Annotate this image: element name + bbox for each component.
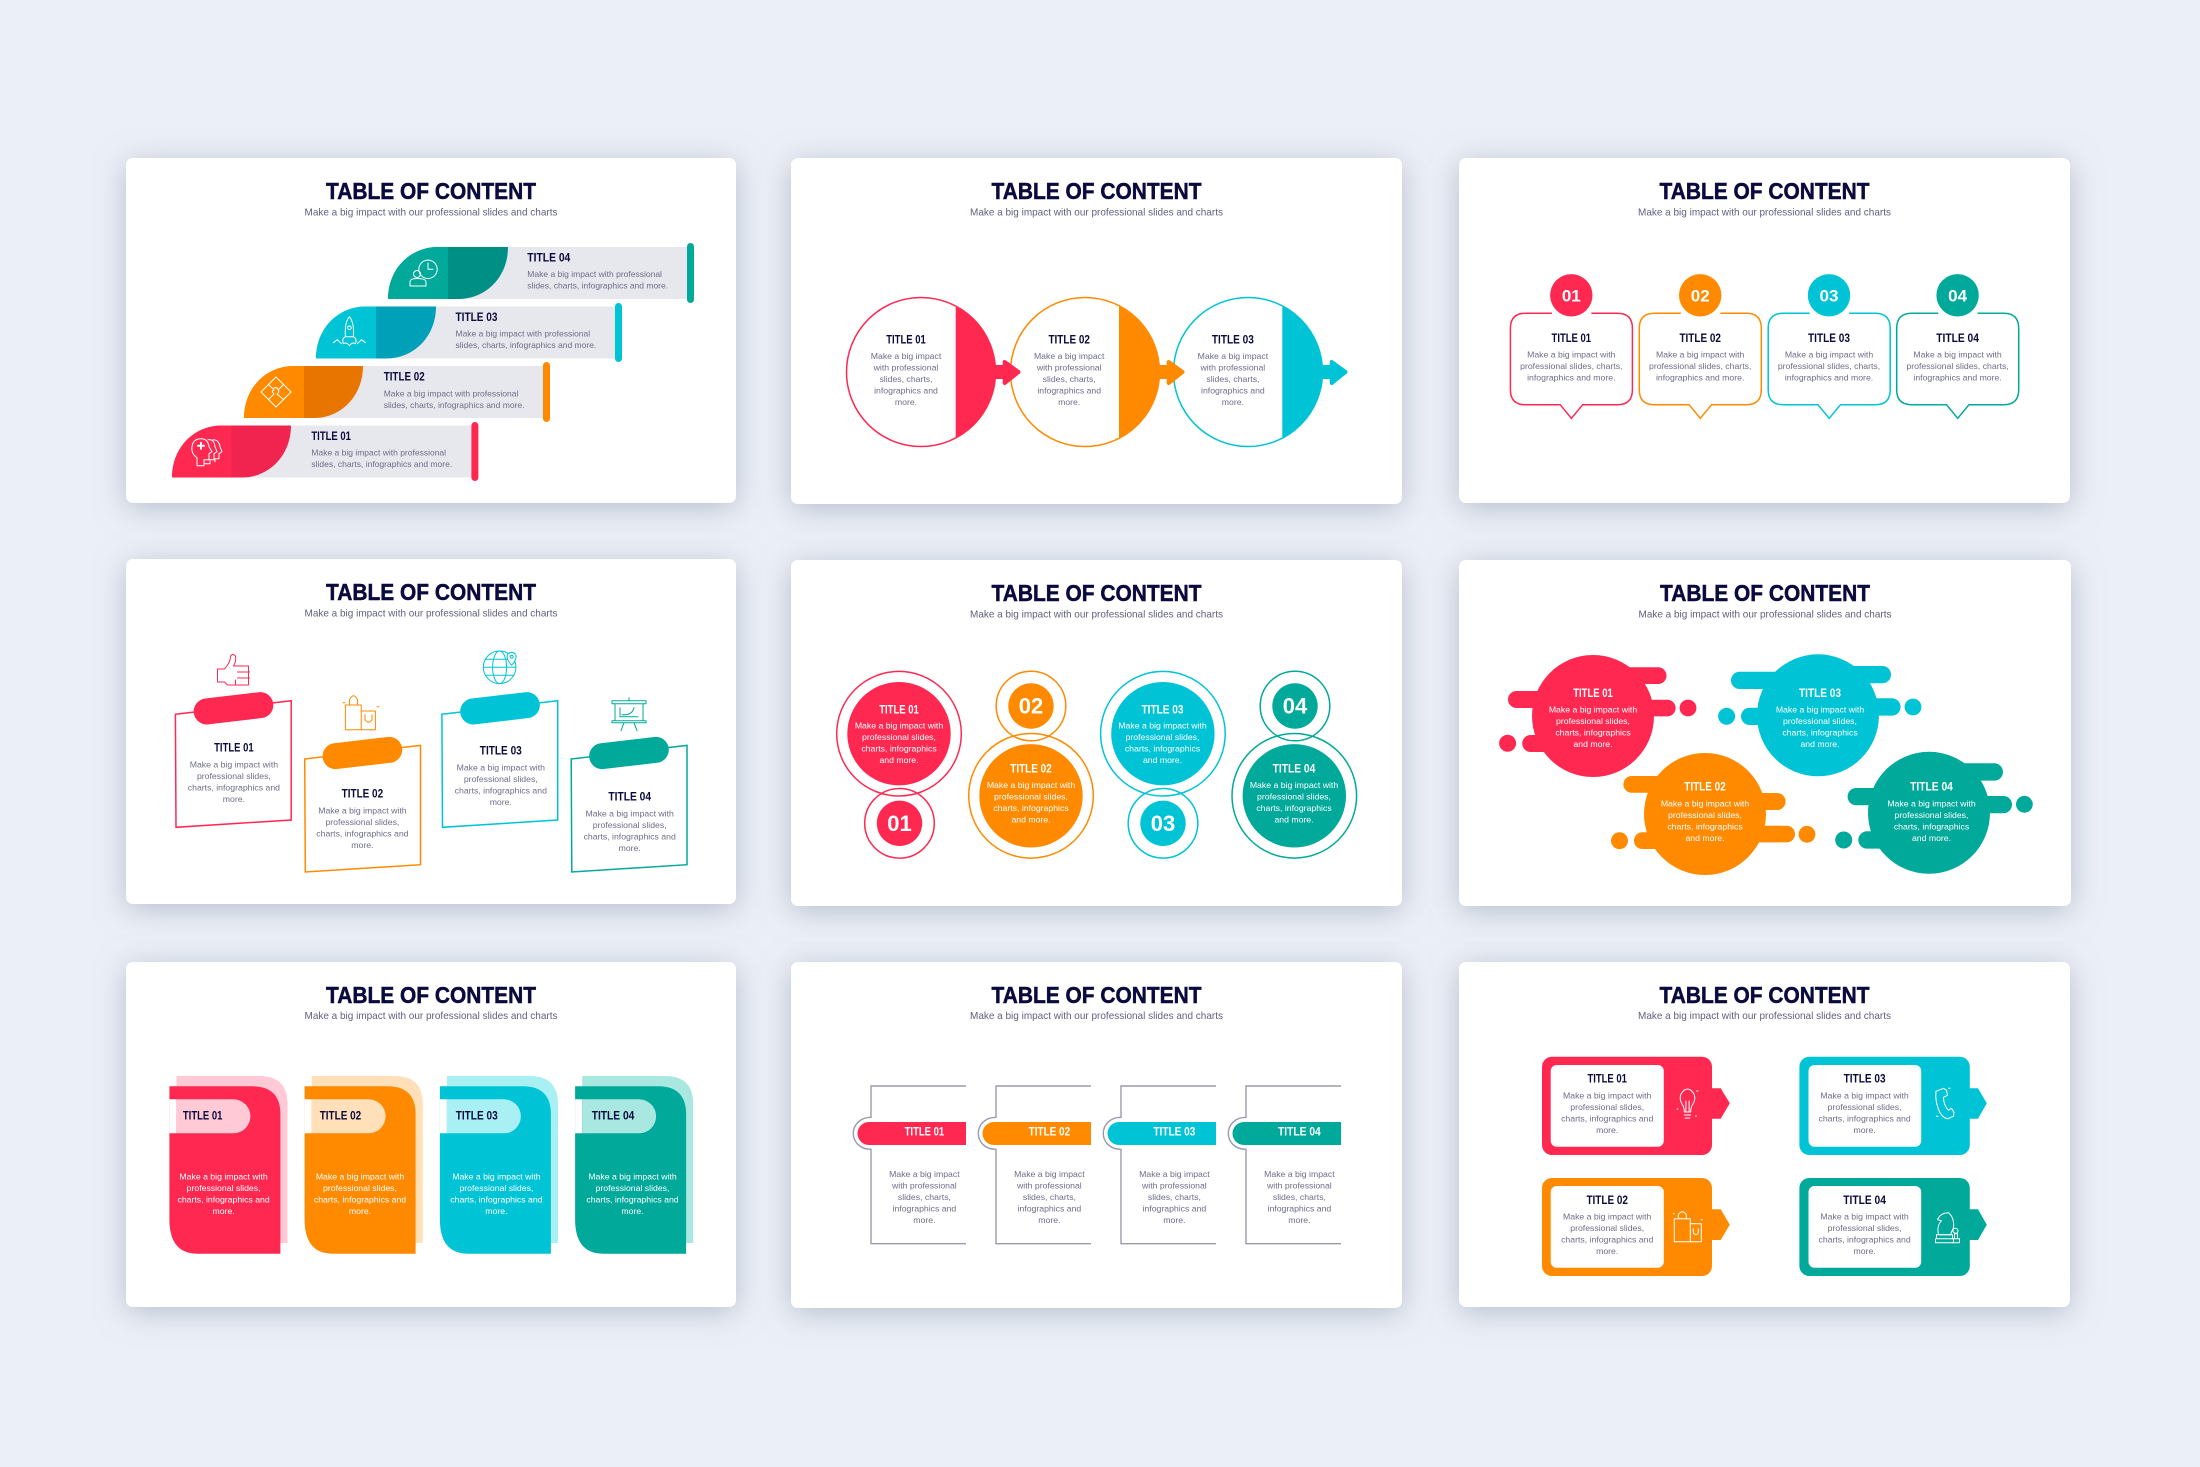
circle 01: TITLE 01: [886, 334, 926, 346]
circle group 04: professional slides,: [1257, 792, 1331, 802]
circle 02: [1010, 298, 1160, 446]
tab card 01: TITLE 01: [183, 1110, 223, 1122]
tab card 02: more.: [349, 1206, 371, 1216]
bubble 03: [1768, 274, 1890, 418]
panel: blobs: [1459, 560, 2071, 906]
circle 02: slides, charts,: [1043, 374, 1096, 384]
icon: puzzle: [261, 377, 291, 407]
note 01: TITLE 01: [214, 743, 254, 755]
tab card 01: professional slides,: [187, 1183, 261, 1193]
tab card 04: Make a big impact with: [588, 1172, 677, 1182]
heading: TABLE OF CONTENT: [326, 982, 536, 1008]
icon: presentation board: [612, 698, 646, 731]
column 02: TITLE 02: [1029, 1127, 1070, 1139]
heading: Make a big impact with our professional slides and charts: [304, 608, 558, 620]
tab card 02: professional slides,: [323, 1183, 397, 1193]
blob 01: professional slides,: [1556, 716, 1630, 726]
tab card 02: Make a big impact with: [316, 1172, 404, 1182]
step 02: Make a big impact with professional: [384, 388, 518, 398]
tag card 03: charts, infographics and: [1818, 1113, 1911, 1123]
blob 02: [1611, 753, 1815, 875]
column 01: slides, charts,: [898, 1192, 951, 1202]
tab card 04: more.: [621, 1206, 644, 1216]
card background: [791, 962, 1402, 1308]
tag card 01: more.: [1596, 1125, 1618, 1135]
tag card 04: Make a big impact with: [1820, 1211, 1909, 1221]
panel: pinned notes: [126, 559, 736, 904]
column 01: more.: [913, 1215, 936, 1225]
heading: TABLE OF CONTENT: [326, 178, 536, 204]
panel: stepped leaf bars: [126, 158, 736, 503]
step 01: [172, 422, 478, 481]
panel: circles with arrows: [791, 158, 1402, 504]
heading: [1638, 178, 1891, 218]
note 01: [175, 654, 291, 827]
arrow 01: [994, 362, 1018, 383]
step 03: [316, 303, 622, 362]
column 02: with professional: [1016, 1180, 1082, 1190]
blob 01: TITLE 01: [1573, 688, 1613, 700]
bubble 02: 02: [1691, 286, 1710, 306]
note 04: professional slides,: [593, 820, 667, 830]
arrow 02: [1158, 362, 1182, 383]
tab card 04: TITLE 04: [592, 1110, 635, 1122]
card background: [126, 962, 736, 1307]
bubble 04: infographics and more.: [1913, 372, 2002, 382]
tab card 04: charts, infographics and: [586, 1195, 679, 1205]
bubble 01: 01: [1562, 286, 1581, 306]
icon: chess knight: [1936, 1213, 1960, 1243]
note 02: Make a big impact with: [318, 805, 407, 815]
column 01: Make a big impact: [889, 1169, 960, 1179]
column 03: infographics and: [1143, 1204, 1206, 1214]
blob 03: [1718, 654, 1921, 776]
tag card 04: professional slides,: [1828, 1223, 1902, 1233]
heading: TABLE OF CONTENT: [992, 982, 1202, 1008]
column 03: Make a big impact: [1139, 1169, 1210, 1179]
column 02: more.: [1038, 1215, 1061, 1225]
step 04: slides, charts, infographics and more.: [527, 280, 668, 290]
icon: globe with pin: [483, 651, 516, 684]
circle 01: more.: [895, 397, 917, 407]
blob 04: TITLE 04: [1910, 782, 1953, 794]
tag card 01: professional slides,: [1570, 1102, 1644, 1112]
card background: [126, 158, 736, 503]
note 02: TITLE 02: [342, 789, 383, 801]
tag card 03: [1799, 1057, 1987, 1155]
column 02: Make a big impact: [1014, 1169, 1085, 1179]
blob 04: [1835, 752, 2033, 874]
heading: [970, 982, 1223, 1022]
bubble 03: infographics and more.: [1785, 372, 1873, 382]
circle group 01: professional slides,: [862, 732, 936, 742]
step 02: slides, charts, infographics and more.: [384, 400, 524, 410]
icon: heads with puzzle: [192, 439, 222, 466]
tab card 03: charts, infographics and: [450, 1195, 543, 1205]
tag card 04: TITLE 04: [1843, 1195, 1886, 1207]
circle 02: infographics and: [1037, 386, 1101, 396]
bubble 04: TITLE 04: [1936, 333, 1979, 345]
column 04: more.: [1288, 1215, 1311, 1225]
bubble 04: professional slides, charts,: [1906, 361, 2009, 371]
column 01: with professional: [891, 1180, 957, 1190]
heading: TABLE OF CONTENT: [1660, 982, 1870, 1008]
circle 01: with professional: [873, 362, 938, 372]
icon: shopping bags: [343, 696, 379, 730]
column 01: TITLE 01: [905, 1127, 945, 1139]
column 04: slides, charts,: [1273, 1192, 1326, 1202]
tab card 01: more.: [212, 1206, 235, 1216]
note 03: charts, infographics and: [455, 785, 547, 795]
note 03: more.: [490, 797, 512, 807]
heading: [1638, 580, 1892, 621]
circle 01: slides, charts,: [879, 374, 933, 384]
column 04: infographics and: [1268, 1204, 1331, 1214]
heading: [304, 178, 558, 218]
column 03: slides, charts,: [1148, 1192, 1201, 1202]
tab card 02: charts, infographics and: [314, 1195, 406, 1205]
step 02: TITLE 02: [384, 372, 425, 384]
column 02: infographics and: [1018, 1204, 1081, 1214]
step 03: slides, charts, infographics and more.: [456, 340, 596, 350]
circle group 02: 02: [1019, 694, 1043, 718]
bubble 01: professional slides, charts,: [1520, 361, 1622, 371]
card background: [126, 559, 736, 904]
tab card 03: [440, 1076, 558, 1254]
bubble 01: [1510, 274, 1632, 418]
blob 01: charts, infographics: [1555, 728, 1631, 738]
tab card 03: more.: [485, 1206, 508, 1216]
circle group 02: and more.: [1011, 814, 1051, 824]
circle group 03: [1101, 671, 1225, 858]
bubble 02: professional slides, charts,: [1649, 361, 1751, 371]
note 03: professional slides,: [464, 774, 538, 784]
circle group 01: Make a big impact with: [855, 721, 943, 731]
tab card 03: professional slides,: [459, 1183, 533, 1193]
bubble 02: Make a big impact with: [1656, 349, 1745, 359]
circle group 02: professional slides,: [994, 792, 1068, 802]
step 03: Make a big impact with professional: [456, 329, 590, 339]
icon: shopping bags: [1673, 1212, 1702, 1242]
tab card 02: TITLE 02: [320, 1110, 361, 1122]
note 04: TITLE 04: [608, 792, 652, 804]
card background: [1459, 560, 2071, 906]
blob 03: and more.: [1800, 739, 1840, 749]
circle 03: TITLE 03: [1212, 334, 1254, 346]
circle group 01: charts, infographics: [861, 744, 937, 754]
blob 04: professional slides,: [1895, 810, 1968, 820]
circle group 02: charts, infographics: [993, 803, 1069, 813]
column 02: [978, 1086, 1091, 1244]
column 04: TITLE 04: [1278, 1127, 1321, 1139]
heading: TABLE OF CONTENT: [992, 178, 1202, 204]
heading: Make a big impact with our professional slides and charts: [1638, 206, 1891, 218]
blob 04: charts, infographics: [1894, 821, 1970, 831]
heading: Make a big impact with our professional slides and charts: [304, 1010, 558, 1022]
tag card 02: [1542, 1178, 1730, 1276]
bubble 02: TITLE 02: [1679, 333, 1721, 345]
tag card 03: TITLE 03: [1844, 1074, 1886, 1086]
icon: telephone: [1936, 1088, 1954, 1119]
circle group 04: Make a big impact with: [1250, 780, 1338, 790]
tab card 03: Make a big impact with: [452, 1172, 541, 1182]
heading: [304, 982, 558, 1022]
bubble 04: [1897, 274, 2019, 418]
step 04: [388, 243, 694, 303]
note 02: charts, infographics and: [316, 828, 409, 838]
note 01: professional slides,: [197, 771, 271, 781]
heading: Make a big impact with our professional slides and charts: [970, 609, 1223, 621]
circle 03: infographics and: [1201, 386, 1265, 396]
blob 03: charts, infographics: [1782, 728, 1858, 738]
circle group 01: [837, 671, 961, 858]
bubble 03: 03: [1820, 286, 1838, 306]
column 01: [853, 1086, 966, 1244]
blob 02: charts, infographics: [1667, 821, 1743, 831]
circle group 04: 04: [1283, 694, 1308, 718]
note 01: Make a big impact with: [190, 759, 278, 769]
circle group 01: 01: [887, 811, 912, 836]
tab card 03: TITLE 03: [456, 1110, 498, 1122]
circle group 04: [1232, 671, 1357, 858]
tag card 02: Make a big impact with: [1563, 1211, 1652, 1221]
icon: clock and person: [410, 260, 437, 286]
heading: TABLE OF CONTENT: [992, 580, 1202, 606]
tag card 03: Make a big impact with: [1820, 1090, 1909, 1100]
bubble 03: professional slides, charts,: [1778, 361, 1880, 371]
heading: Make a big impact with our professional slides and charts: [304, 206, 558, 218]
blob 02: professional slides,: [1668, 810, 1742, 820]
column 03: with professional: [1141, 1180, 1207, 1190]
tag card 01: [1542, 1057, 1730, 1155]
tag card 03: more.: [1853, 1125, 1876, 1135]
circle 02: TITLE 02: [1048, 334, 1090, 346]
tag card 01: TITLE 01: [1587, 1074, 1627, 1086]
panel: arrow tag cards: [1459, 962, 2070, 1307]
note 02: [305, 696, 420, 872]
circle group 03: and more.: [1143, 755, 1182, 765]
circle group 02: Make a big impact with: [987, 780, 1075, 790]
circle group 02: [969, 671, 1093, 858]
icon: thumbs up: [218, 654, 250, 685]
tag card 04: charts, infographics and: [1818, 1234, 1911, 1244]
heading: TABLE OF CONTENT: [1660, 580, 1870, 606]
step 01: slides, charts, infographics and more.: [311, 459, 452, 469]
card background: [791, 158, 1402, 504]
note 03: Make a big impact with: [457, 762, 545, 772]
bubble 03: Make a big impact with: [1785, 349, 1873, 359]
tag card 02: TITLE 02: [1586, 1195, 1628, 1207]
panel: speech bubbles: [1459, 158, 2070, 503]
bubble 01: Make a big impact with: [1527, 349, 1616, 359]
circle group 02: TITLE 02: [1010, 764, 1052, 776]
panel: outlined columns with title bars: [791, 962, 1402, 1308]
column 01: infographics and: [893, 1204, 956, 1214]
note 04: Make a big impact with: [586, 808, 674, 818]
circle group 03: professional slides,: [1126, 732, 1199, 742]
blob 03: Make a big impact with: [1776, 705, 1864, 715]
bubble 04: Make a big impact with: [1913, 349, 2002, 359]
heading: Make a big impact with our professional slides and charts: [970, 206, 1223, 218]
tag card 01: Make a big impact with: [1563, 1090, 1652, 1100]
heading: Make a big impact with our professional slides and charts: [970, 1010, 1223, 1022]
bubble 03: TITLE 03: [1808, 333, 1850, 345]
blob 04: Make a big impact with: [1887, 798, 1976, 808]
note 01: charts, infographics and: [188, 782, 280, 792]
heading: [970, 178, 1223, 218]
blob 01: [1499, 655, 1696, 777]
heading: Make a big impact with our professional slides and charts: [1638, 609, 1892, 621]
bubble 01: TITLE 01: [1552, 333, 1592, 345]
column 04: [1228, 1086, 1341, 1244]
tag card 01: charts, infographics and: [1561, 1113, 1653, 1123]
tab card 01: [169, 1076, 288, 1254]
note 01: more.: [223, 794, 245, 804]
step 02: [244, 362, 550, 422]
circle 01: infographics and: [874, 386, 938, 396]
circle group 04: TITLE 04: [1273, 764, 1316, 776]
step 01: TITLE 01: [311, 431, 351, 443]
circle group 03: charts, infographics: [1125, 744, 1201, 754]
tab card 02: [305, 1076, 423, 1254]
arrow 03: [1321, 362, 1346, 383]
note 03: TITLE 03: [480, 745, 522, 757]
bubble 02: infographics and more.: [1656, 372, 1744, 382]
column 04: Make a big impact: [1264, 1169, 1335, 1179]
heading: Make a big impact with our professional slides and charts: [1638, 1010, 1891, 1022]
note 02: more.: [351, 840, 374, 850]
circle 03: with professional: [1200, 362, 1265, 372]
note 04: more.: [619, 843, 641, 853]
blob 02: Make a big impact with: [1661, 798, 1749, 808]
panel: linked circles: [791, 560, 1402, 906]
note 03: [442, 651, 558, 827]
step 03: TITLE 03: [456, 312, 498, 324]
heading: [970, 580, 1223, 621]
step 04: TITLE 04: [527, 253, 571, 265]
tag card 03: professional slides,: [1828, 1102, 1902, 1112]
column 03: [1103, 1086, 1216, 1244]
circle group 04: charts, infographics: [1256, 803, 1332, 813]
icon: rocket: [333, 317, 365, 346]
heading: TABLE OF CONTENT: [326, 579, 536, 605]
tag card 04: more.: [1853, 1246, 1876, 1256]
note 04: [571, 698, 687, 872]
circle 02: more.: [1058, 397, 1080, 407]
circle group 03: TITLE 03: [1142, 704, 1184, 716]
circle 03: more.: [1222, 397, 1244, 407]
tab card 01: Make a big impact with: [179, 1172, 268, 1182]
blob 03: professional slides,: [1783, 716, 1857, 726]
circle group 01: and more.: [879, 755, 919, 765]
card background: [791, 560, 1402, 906]
tag card 02: professional slides,: [1570, 1223, 1644, 1233]
icon: light bulb: [1677, 1089, 1698, 1118]
tag card 02: charts, infographics and: [1561, 1234, 1653, 1244]
tab card 01: charts, infographics and: [177, 1195, 270, 1205]
bubble 02: [1639, 274, 1761, 418]
blob 01: Make a big impact with: [1549, 705, 1637, 715]
circle 01: Make a big impact: [871, 351, 942, 361]
column 03: TITLE 03: [1153, 1127, 1195, 1139]
tag card 02: more.: [1596, 1246, 1618, 1256]
circle 03: slides, charts,: [1206, 374, 1259, 384]
blob 02: TITLE 02: [1684, 782, 1726, 794]
tab card 04: [575, 1076, 693, 1254]
panel: tabbed cards: [126, 962, 736, 1307]
circle group 03: Make a big impact with: [1118, 721, 1207, 731]
circle group 01: TITLE 01: [879, 704, 919, 716]
heading: TABLE OF CONTENT: [1660, 178, 1870, 204]
column 04: with professional: [1266, 1180, 1332, 1190]
step 04: Make a big impact with professional: [527, 269, 662, 279]
bubble 01: infographics and more.: [1527, 372, 1615, 382]
tab card 04: professional slides,: [596, 1183, 669, 1193]
column 02: slides, charts,: [1023, 1192, 1076, 1202]
blob 01: and more.: [1573, 739, 1613, 749]
card background: [1459, 962, 2070, 1307]
note 02: professional slides,: [325, 817, 399, 827]
circle 02: with professional: [1036, 362, 1102, 372]
column 03: more.: [1163, 1215, 1186, 1225]
circle group 03: 03: [1151, 811, 1175, 836]
heading: [304, 579, 558, 620]
blob 02: and more.: [1685, 833, 1725, 843]
blob 03: TITLE 03: [1799, 688, 1841, 700]
note 04: charts, infographics and: [584, 831, 676, 841]
step 01: Make a big impact with professional: [311, 448, 446, 458]
circle 02: Make a big impact: [1034, 351, 1105, 361]
bubble 04: 04: [1948, 286, 1968, 306]
circle group 04: and more.: [1274, 814, 1314, 824]
blob 04: and more.: [1912, 833, 1951, 843]
circle 03: Make a big impact: [1198, 351, 1269, 361]
circle 01: [846, 298, 996, 446]
card background: [1459, 158, 2070, 503]
circle 03: [1174, 298, 1323, 446]
heading: [1638, 982, 1891, 1022]
tag card 04: [1799, 1178, 1987, 1276]
